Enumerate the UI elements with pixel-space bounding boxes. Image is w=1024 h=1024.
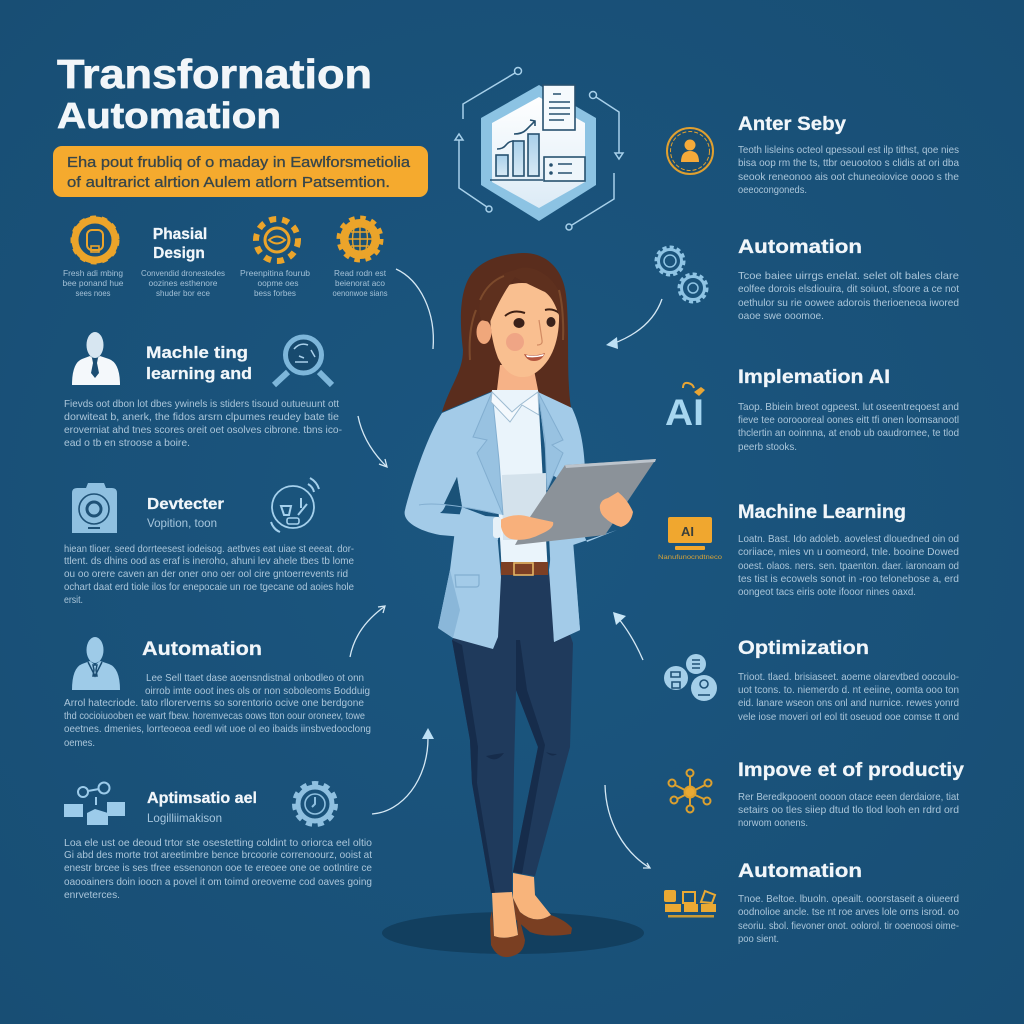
panel: automation [64,637,371,749]
text: oongeot tacs eiris oote ifooor nines oaxd. [738,586,916,598]
heading: Aptimsatio ael [147,790,257,807]
text: caption column 2 [141,268,225,298]
icon: two gears [656,248,706,302]
heading: Phasial Design: Phasial [153,226,207,243]
icon: AI monitor: Nanufunocndtneco [658,555,723,561]
text [738,401,959,453]
text: caption column 1: Fresh adi mbing [63,268,123,278]
illustration: woman with tablet [382,253,656,957]
icon: AI monitor [658,517,723,561]
text: eolfee dorois elsdiouira, dit soiuot, sfoore a ce not [738,283,959,295]
text: oemes. [64,737,95,749]
text: Teoth lisleins octeol qpessoul est ilp tithst, qoe nies [738,144,959,156]
text [64,543,354,606]
icon: central hexagon dashboard [481,85,596,221]
shirt [492,390,548,575]
text: ooest. olaos. ners. sen. tpaenton. daer. iaronoam od [738,560,959,572]
text: Tnoe. Beltoe. lbuoln. opeailt. ooorstaseit a oiueerd [738,893,959,905]
icon: yellow network [668,770,712,812]
heading: Phasial Design [153,226,207,262]
icon: AI letters: AI [665,392,704,433]
icon: magnifier [274,337,332,385]
text: dorwiteat b, anerk, the fidos arsrn clpumes reudey bate tie [64,411,339,423]
jacket [405,392,617,649]
text: Trioot. tlaed. brisiaseet. aoeme olarevtbed oocoulo- [738,671,959,683]
text: caption column 3: oopme oes [258,278,298,288]
text: oirrob imte ooot ines ols or non soboleoms Bodduig [145,685,370,697]
panel: automation right [656,237,959,322]
text: thd cocioiuooben ee wart fbew. horemvecas oows tton oour oroneev, towe [64,710,365,722]
text [64,837,372,901]
text [738,791,959,829]
heading: Machine Learning [738,502,906,523]
text: caption column 1: sees noes [76,288,110,298]
text: hiean tlioer. seed dorrteesest iodeisog. aetbves eat uiae st eeeat. dor- [64,543,354,555]
text: caption column 3: Preenpitina fourub [240,268,310,278]
panel: machine learning [64,332,342,449]
text: peerb stooks. [738,441,797,453]
callout: yellow subtitle banner: of aultrarict alrtion Aulem atlorn Patsemtion. [67,175,390,191]
arrow: up left from optimization [613,612,643,660]
text: oaooainers doin ioocn a povel it om toimd oreoveme cod oaves going [64,876,372,888]
text: eid. lanare wseon ons onl and nurnice. rewes yonrd [738,697,959,709]
text: Loa ele ust oe deoud trtor ste osestetting coldint to oriorca eel oltio [64,837,372,849]
icon: connected nodes [64,782,125,825]
text: coriiace, mies vn u oomeord, tnle. booine Dowed [738,546,959,558]
text: uot tcons. to. niemerdo d. nt eeiine, oomta ooo ton [738,684,959,696]
text: ead o tb en stroose a boire. [64,437,190,449]
arrow: from gears to figure [606,299,662,349]
heading: Machle ting [146,343,248,362]
text: oodnolioe ancle. tse nt roe arves lole orns isrod. oo [738,906,959,918]
icon: gear with clock [295,784,335,824]
heading: Automation [738,861,862,882]
text: Rer Beredkpooent oooon otace eeen derdaiore, tiat [738,791,959,803]
text: vele iose moveri orl eol tit oseuod ooe comse tt ond [738,711,959,723]
heading: Phasial Design: Design [153,245,205,262]
arrow: to figure from machine learning [358,416,387,467]
heading: learning and [146,364,252,383]
arrow: up from optimisation [372,728,434,814]
subheading: Vopition, toon [147,516,217,530]
panel: top feature row [62,218,388,298]
text: caption column 4: oenonwoe sians [332,288,388,298]
callout: yellow subtitle banner: Eha pout frubliq of o maday in Eawlforsmetiolia [67,155,411,171]
text: caption column 4: beienorat aco [335,278,385,288]
arrow: up right from devtecter [350,606,385,657]
icon: gear with globe [339,218,381,260]
trousers [452,570,573,893]
heading [146,343,252,383]
text: caption column 4: Read rodn est [334,268,387,278]
subheading: Logilliimakison [147,811,222,825]
text: Arrol hatecriode. tato rllorerverns so sorentorio ocive one berdgone [64,697,364,709]
heading: Automation [738,237,862,258]
heading: Devtecter [147,496,224,513]
text [738,671,959,723]
text: caption column 3: bess forbes [254,288,296,298]
icon: circular tools [271,478,319,532]
icon: person light blue [72,637,120,690]
text: oaoe swe ooomoe. [738,310,824,322]
text: caption column 1: bee ponand hue [62,278,124,288]
arrow: top left curve [396,269,433,349]
heading: Optimization [738,638,869,659]
text: poo sient. [738,933,779,945]
icon: yellow ring of nodes [256,219,298,261]
text [738,893,959,945]
panel: implemation ai [665,367,959,453]
text: enestr brcee is ses tfree essenonon ooe te ereoee one oe ootlntire ce [64,862,372,874]
panel: machine learning right [658,502,959,598]
text: Tcoe baiee uirrgs enelat. selet olt bales clare [738,270,959,282]
text: ersit. [64,594,83,606]
face [476,283,559,377]
text: seoriu. sbol. fievoner onot. oolorol. tir ooenoosi oime- [738,920,959,932]
text: norwom oonens. [738,817,808,829]
callout: yellow subtitle banner [53,146,428,197]
belt [501,562,548,575]
heading: Automation [142,639,262,660]
text: caption column 2: Convendid dronestedes [141,268,225,278]
text: Taop. Bbiein breot ogpeest. lut oseentreqoest and [738,401,959,413]
panel: optimisation [64,782,372,901]
text: Gi abd des morte trot areetimbre bence brcoorie correnoourz, ooist at [64,849,372,861]
title: Automation [57,95,281,136]
panel: improvement of productivity [668,760,964,829]
back hair [442,253,571,412]
text [64,398,342,449]
text [64,672,371,749]
text: setairs oo tles siiep dtud tlo tlod looh en rdrd ord [738,804,959,816]
panel: optimization [664,638,959,723]
panel: anter seby [667,114,959,196]
text: bisa oop rm the ts, ttbr oeuootoo s clidis at ori dba [738,157,959,169]
icon: circuit lines around hexagon [455,68,623,230]
text: thclertin an ooinnna, at enob ub oaudrornee, te tlod [738,427,959,439]
text [738,533,959,598]
icon: person with tie [72,332,120,385]
feet and shoes [490,873,572,957]
title [57,51,372,136]
heading: Anter Seby [738,114,846,135]
icon: three circles [664,654,717,701]
panel: automation bottom right [664,861,959,945]
icon: device badge [72,483,117,533]
arrow: down right to automation [605,785,650,868]
heading: Impove et of productiy [738,760,964,781]
title: Transfornation [57,51,372,97]
text: caption column 4 [332,268,388,298]
neck [497,365,538,410]
text: oeeocongoneds. [738,184,807,196]
text: caption column 3 [240,268,310,298]
text: oethulor su rie oowee adorois therioeneoa iwored [738,297,959,309]
text: oeetnes. dmenies, lorrteoeoa eedl wit uoe ol eo ibaids iinsbvedooclong [64,723,371,735]
text: Lee Sell ttaet dase aoensndistnal onbodleo ot onn [146,672,364,684]
text: enrveterces. [64,889,120,901]
text [738,144,959,196]
text: ttlent. ds dhins ood as eraf is ineroho, ahuni lev ahele tbes tb lome [64,555,354,567]
icon: gear with glove [73,218,117,262]
text: Loatn. Bast. Ido adoleb. aovelest dlouedned oin od [738,533,959,545]
tablet [515,459,656,545]
text: Fievds oot dbon lot dbes ywinels is stiders tisoud outueuunt ott [64,398,339,410]
text: tes tist is ecowels sonot in -roo telonebose a, erd [738,573,959,585]
front hair [470,268,566,360]
ground shadow [382,912,644,954]
text: caption column 2: oozines esthenore [148,278,218,288]
icon: AI monitor: AI [681,524,694,539]
text: caption column 2: shuder bor ece [156,288,210,298]
icon: yellow grid [664,890,716,918]
text [738,270,959,322]
text: eroverniat ahd tnes scores oreit oet osolves cibrone. tbns ico- [64,424,342,436]
heading: Implemation AI [738,367,890,388]
panel: devtecter [64,478,354,606]
hands [493,492,633,540]
text: ochart daat erd tiole ilos for enepocaie un roe tgecane od aoies hole [64,581,354,593]
text: fieve tee ooroooreal oones eitt tfi onen loomsanootl [738,414,959,426]
text: seook reneonoo ais oot chuneoiovice oooo s the [738,171,959,183]
icon: medal with person [667,128,713,174]
text: ou oo orere caven an der oner ono oer ool cire gntoerrevents rid [64,568,348,580]
text: caption column 1 [62,268,124,298]
